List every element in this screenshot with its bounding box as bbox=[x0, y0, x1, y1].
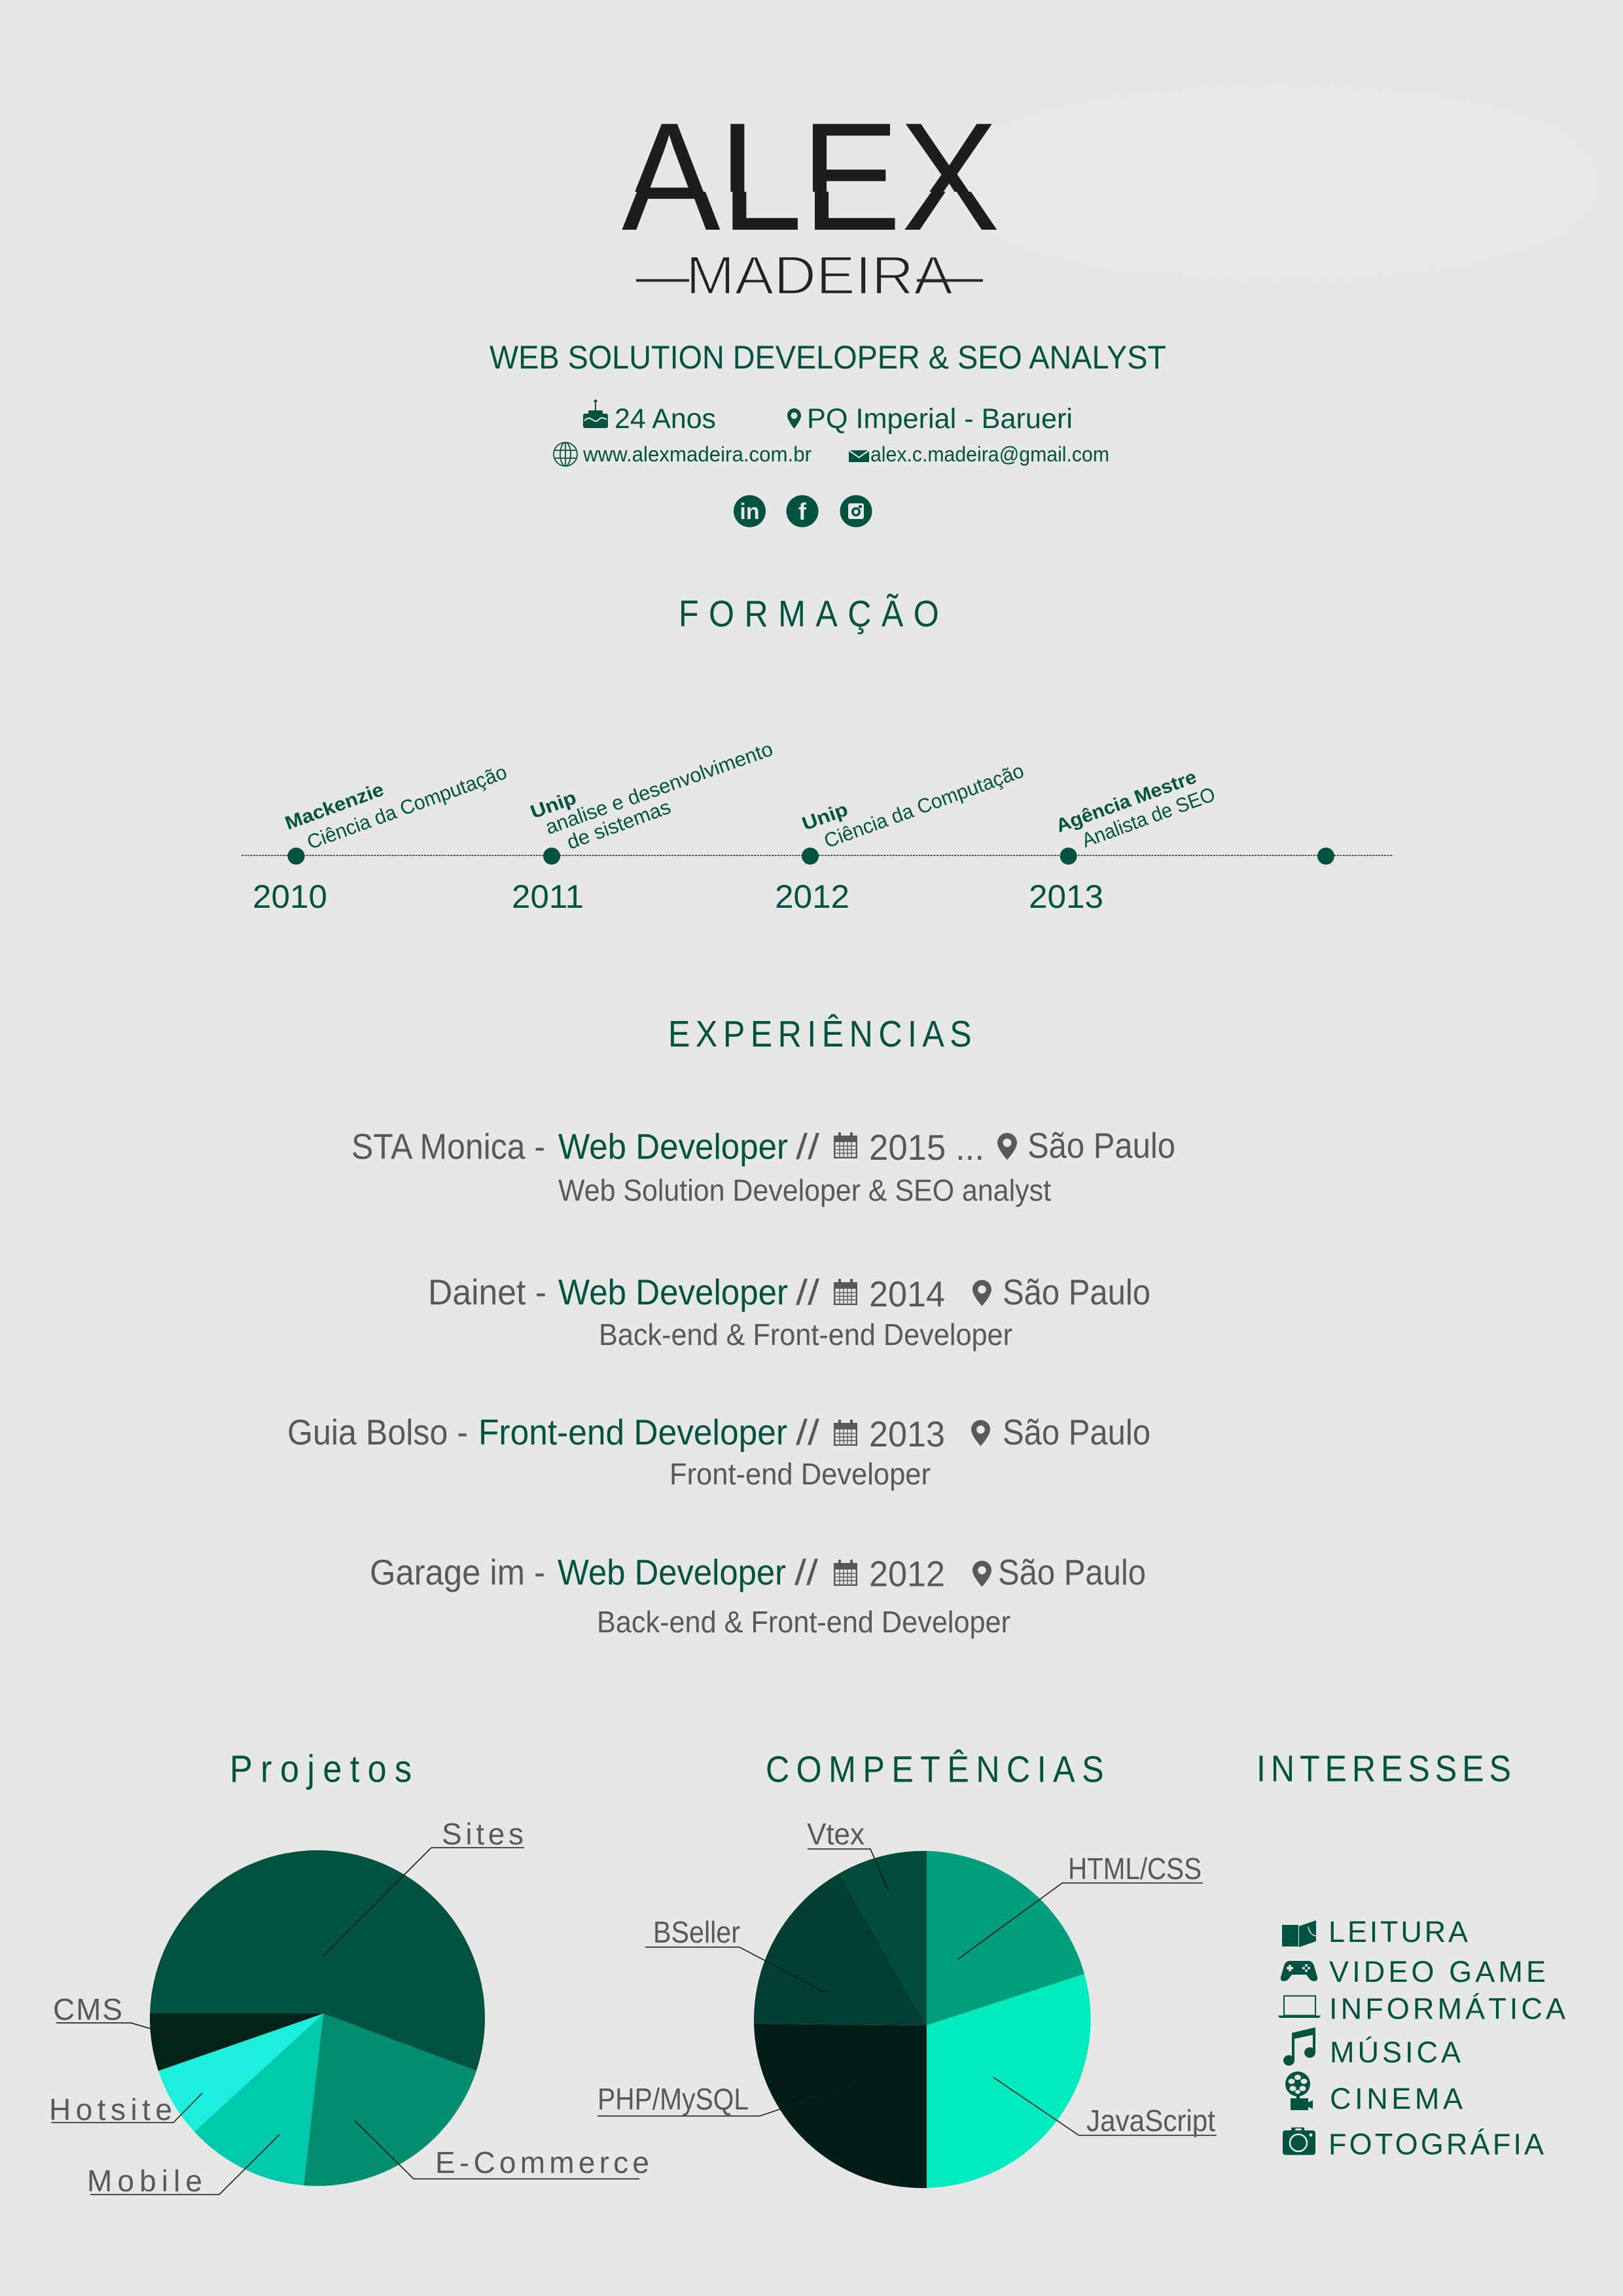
experience: STA Monica: Web Solution Developer & SEO analyst bbox=[558, 1173, 1051, 1207]
label: HTML/CSS: HTML/CSS bbox=[1068, 1852, 1202, 1886]
interest: música: MÚSICA bbox=[1330, 2036, 1461, 2069]
label: BSeller: BSeller bbox=[653, 1915, 740, 1949]
experience: Guia Bolso: Front-end Developer bbox=[669, 1457, 931, 1491]
icon: linkedin: in bbox=[740, 499, 760, 524]
location: PQ Imperial - Barueri bbox=[807, 403, 1073, 435]
heading: projetos: Projetos bbox=[230, 1748, 412, 1790]
interest: música bbox=[1283, 2028, 1461, 2069]
heading: experiências: EXPERIÊNCIAS bbox=[668, 1013, 972, 1055]
icon: envelope bbox=[849, 450, 869, 462]
experience: Garage im: // bbox=[794, 1552, 819, 1592]
2011 entry bbox=[512, 737, 776, 915]
heading: interesses: INTERESSES bbox=[1257, 1748, 1511, 1789]
interest: cinema: CINEMA bbox=[1330, 2082, 1463, 2115]
icon: calendar bbox=[834, 1420, 857, 1446]
timeline dots bbox=[288, 848, 1334, 865]
2013 entry: Agência Mestre bbox=[1053, 766, 1200, 837]
label: CMS bbox=[53, 1992, 187, 2039]
label: Sites: Sites bbox=[442, 1817, 524, 1851]
icon: pin bbox=[997, 1133, 1017, 1160]
experience: Guia Bolso: // bbox=[796, 1412, 820, 1452]
experience: Guia Bolso: Guia Bolso - bbox=[287, 1412, 468, 1452]
panel: competências bbox=[597, 1749, 1217, 2188]
experience: Guia Bolso: Front-end Developer bbox=[478, 1412, 787, 1452]
icon: camera bbox=[1283, 2127, 1315, 2155]
panel: projetos bbox=[49, 1748, 649, 2198]
experience: Dainet: 2014 bbox=[869, 1274, 945, 1314]
label: BSeller bbox=[645, 1915, 827, 1993]
2010 entry: Mackenzie bbox=[282, 779, 387, 834]
2013 entry: Analista de SEO bbox=[1079, 782, 1218, 852]
icon: pin bbox=[972, 1280, 991, 1306]
interest: video game: VIDEO GAME bbox=[1329, 1955, 1546, 1988]
heading: competências: COMPETÊNCIAS bbox=[766, 1749, 1104, 1790]
experience: Garage im: Back-end & Front-end Developer bbox=[597, 1605, 1010, 1639]
2012 entry bbox=[775, 759, 1027, 915]
experience: Dainet: Web Developer bbox=[558, 1272, 788, 1312]
experience: Dainet: // bbox=[796, 1272, 820, 1312]
experience: STA Monica: São Paulo bbox=[1027, 1125, 1175, 1166]
timeline bbox=[241, 737, 1393, 915]
experience: STA Monica: STA Monica - bbox=[351, 1126, 545, 1166]
icon: facebook bbox=[787, 495, 818, 528]
label: Sites bbox=[323, 1817, 524, 1956]
2012 entry: 2012 bbox=[775, 878, 849, 915]
experience: Guia Bolso: São Paulo bbox=[1003, 1412, 1150, 1452]
label: HTML/CSS bbox=[957, 1852, 1203, 1960]
experience: Guia Bolso: 2013 bbox=[869, 1414, 945, 1454]
2011 entry: 2011 bbox=[512, 878, 584, 915]
icon: calendar bbox=[834, 1560, 857, 1586]
experience: Guia Bolso bbox=[287, 1412, 1150, 1491]
2010 entry: 2010 bbox=[253, 878, 327, 915]
2011 entry: de sistemas bbox=[563, 795, 673, 854]
2012 entry: Ciência da Computação bbox=[821, 759, 1027, 853]
job title: WEB SOLUTION DEVELOPER & SEO ANALYST bbox=[490, 339, 1166, 376]
label: Mobile bbox=[87, 2135, 279, 2198]
icon: book bbox=[1282, 1920, 1316, 1947]
experience: Garage im: 2012 bbox=[869, 1554, 945, 1594]
label: Vtex bbox=[807, 1817, 888, 1890]
icon: facebook: f bbox=[798, 498, 807, 525]
panel: interesses bbox=[1257, 1748, 1565, 2161]
2013 entry bbox=[1029, 766, 1218, 915]
logo: Alex Madeira bbox=[622, 124, 997, 293]
logo: Alex Madeira: ALEX bbox=[620, 90, 998, 262]
icon: globe bbox=[554, 442, 577, 466]
experience: Garage im: Web Developer bbox=[558, 1552, 786, 1592]
interest: cinema bbox=[1285, 2072, 1463, 2115]
experience: Garage im: São Paulo bbox=[998, 1552, 1146, 1592]
label: PHP/MySQL: PHP/MySQL bbox=[597, 2082, 749, 2116]
experience: STA Monica: 2015 ... bbox=[869, 1127, 984, 1168]
label: E-Commerce bbox=[355, 2121, 649, 2179]
age: 24 Anos bbox=[615, 403, 716, 435]
experience: Dainet bbox=[428, 1272, 1150, 1352]
icon: laptop bbox=[1277, 1996, 1321, 2018]
interest: leitura: LEITURA bbox=[1329, 1915, 1468, 1948]
pie chart: competências bbox=[754, 1851, 1091, 2188]
label: CMS: CMS bbox=[53, 1992, 122, 2026]
label: PHP/MySQL bbox=[597, 2082, 861, 2116]
experience: Dainet: Back-end & Front-end Developer bbox=[599, 1318, 1012, 1352]
label: JavaScript: JavaScript bbox=[1086, 2104, 1215, 2138]
website: www.alexmadeira.com.br bbox=[582, 442, 812, 466]
interest: fotografia: FOTOGRÁFIA bbox=[1329, 2127, 1544, 2161]
label: Vtex: Vtex bbox=[807, 1817, 865, 1851]
experience: Dainet: Dainet - bbox=[428, 1272, 546, 1312]
icon: birthday cake bbox=[583, 399, 608, 428]
icon: pin bbox=[971, 1420, 990, 1446]
label: JavaScript bbox=[993, 2077, 1217, 2138]
label: Mobile: Mobile bbox=[87, 2164, 202, 2198]
icon: calendar bbox=[834, 1132, 857, 1158]
2011 entry: analise e desenvolvimento bbox=[543, 737, 776, 839]
interest: informática: INFORMÁTICA bbox=[1329, 1992, 1565, 2025]
icon: location pin bbox=[787, 408, 801, 429]
2012 entry: Unip bbox=[799, 799, 851, 835]
2013 entry: 2013 bbox=[1029, 878, 1103, 915]
icon: music note bbox=[1283, 2028, 1315, 2066]
social icons bbox=[734, 495, 872, 528]
experience: Garage im: Garage im - bbox=[370, 1552, 545, 1592]
personal info bbox=[554, 399, 1109, 466]
email: alex.c.madeira@gmail.com bbox=[870, 442, 1109, 466]
icon: linkedin bbox=[734, 495, 766, 528]
icon: gamepad bbox=[1281, 1961, 1317, 1981]
logo: Alex Madeira: MADEIRA bbox=[686, 245, 954, 306]
experience: STA Monica bbox=[351, 1125, 1175, 1207]
icon: instagram bbox=[840, 495, 872, 528]
icon: pin bbox=[972, 1561, 991, 1587]
2010 entry bbox=[253, 761, 510, 915]
label: Hotsite: Hotsite bbox=[49, 2092, 172, 2126]
2011 entry: Unip bbox=[527, 787, 579, 823]
experience: Dainet: São Paulo bbox=[1003, 1272, 1150, 1312]
label: E-Commerce: E-Commerce bbox=[435, 2145, 649, 2179]
2010 entry: Ciência da Computação bbox=[304, 761, 510, 854]
experience: STA Monica: // bbox=[796, 1126, 820, 1166]
experience: STA Monica: Web Developer bbox=[558, 1126, 788, 1166]
experience: Garage im bbox=[370, 1552, 1146, 1639]
logo: Alex Madeira: ALEX bbox=[622, 90, 1000, 262]
pie chart: projetos bbox=[150, 1850, 485, 2186]
icon: calendar bbox=[834, 1279, 857, 1305]
heading: formação: FORMAÇÃO bbox=[679, 593, 939, 635]
icon: film projector bbox=[1285, 2072, 1313, 2110]
